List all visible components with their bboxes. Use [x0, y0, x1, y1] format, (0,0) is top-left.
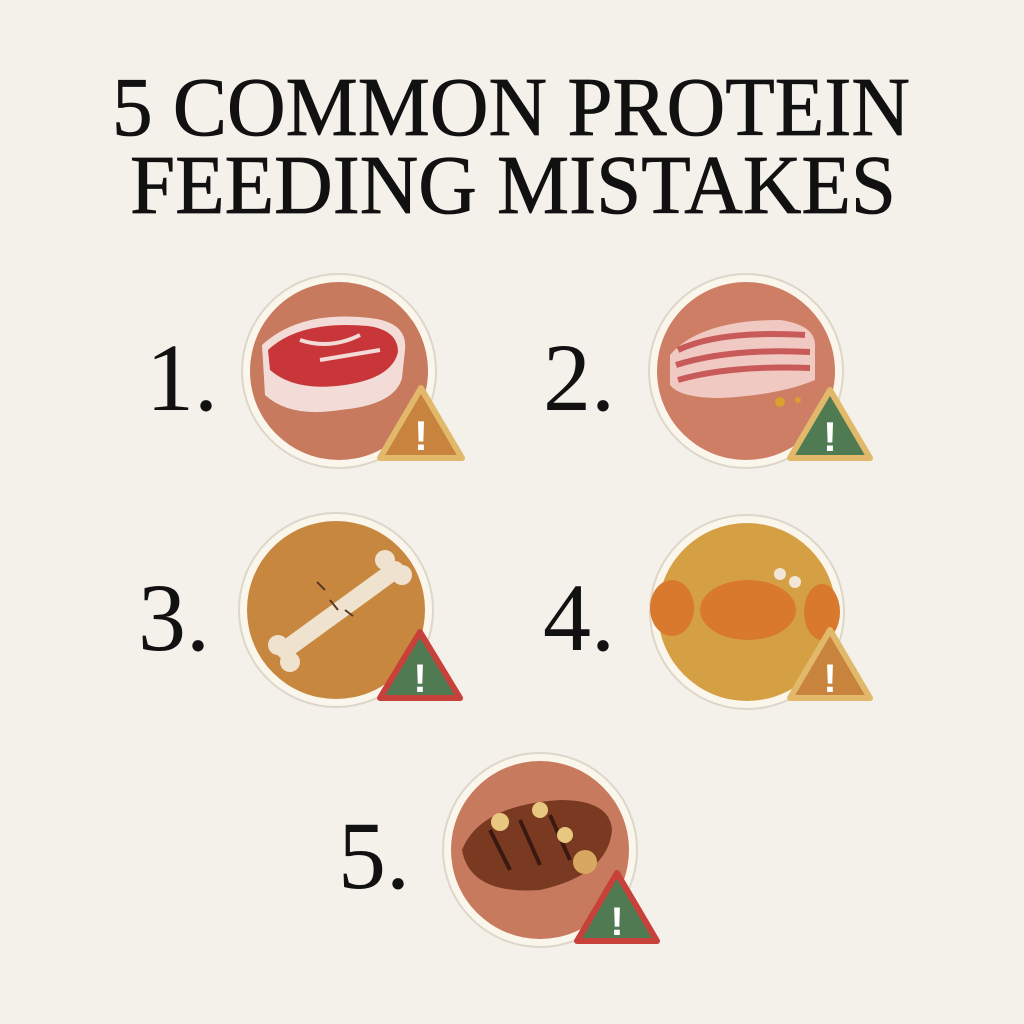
circle 4 [650, 515, 844, 709]
circle 5 [443, 753, 637, 947]
icon: warning 3: ! [413, 657, 427, 701]
icon: warning 1: ! [414, 412, 428, 459]
item 2 [543, 274, 870, 468]
item 3 [138, 513, 460, 707]
icon: warning 2: ! [823, 413, 837, 460]
circle 1 [242, 274, 436, 468]
title: 5 COMMON PROTEIN [112, 61, 910, 154]
number 3: 3. [138, 564, 210, 671]
icon: steak with onions [462, 800, 612, 890]
item 5 [338, 753, 657, 947]
icon: roast chickens [650, 568, 840, 640]
icon: warning 2 [790, 390, 870, 460]
item 4 [543, 515, 870, 709]
number 1: 1. [146, 324, 218, 431]
icon: warning 5 [577, 873, 657, 944]
icon: raw steak [262, 317, 405, 412]
number 2: 2. [543, 324, 615, 431]
circle 3 [239, 513, 433, 707]
title: FEEDING MISTAKES [130, 139, 896, 232]
number 4: 4. [543, 564, 615, 671]
title [112, 61, 910, 232]
icon: warning 5: ! [610, 900, 624, 944]
icon: warning 3 [380, 632, 460, 701]
icon: warning 1 [380, 388, 462, 459]
number 5: 5. [338, 802, 410, 909]
circle 2 [649, 274, 843, 468]
icon: broken bone [268, 550, 412, 672]
icon: warning 4 [790, 630, 870, 701]
item 1 [146, 274, 462, 468]
icon: bacon [670, 320, 815, 407]
icon: warning 4: ! [823, 657, 837, 701]
